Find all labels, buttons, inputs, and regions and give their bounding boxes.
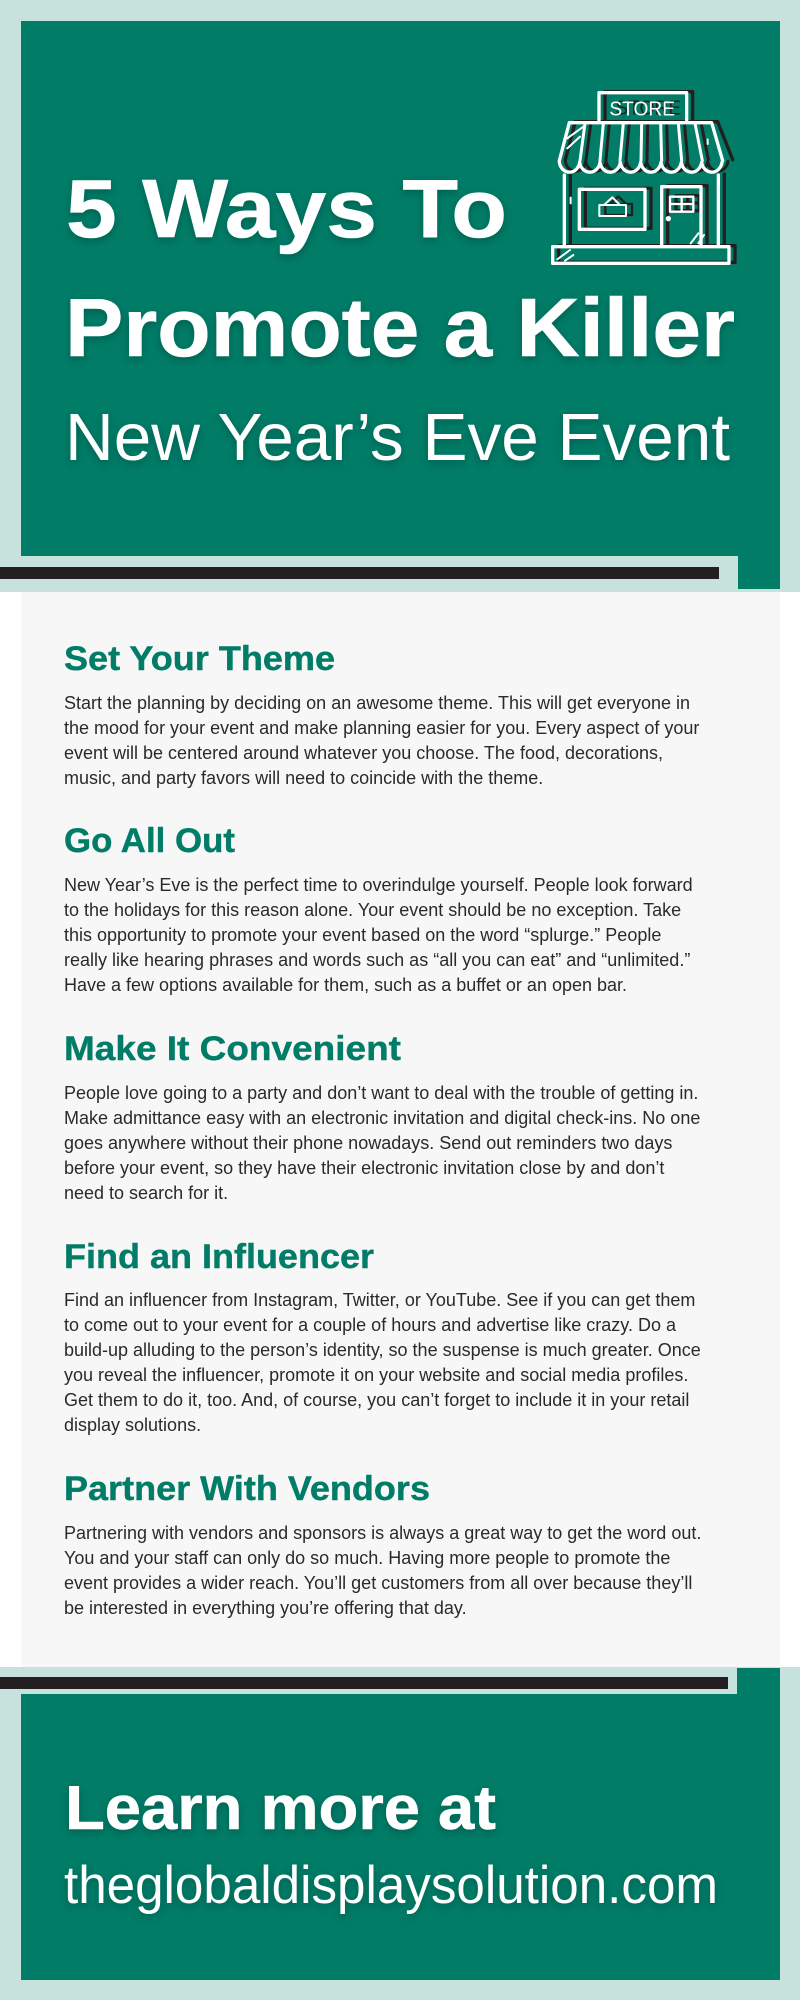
section: Set Your Theme: the mood for your event and make planning easier for you. Every aspect of your (64, 718, 699, 738)
section: Set Your Theme: Start the planning by deciding on an awesome theme. This will get everyone in (64, 693, 690, 713)
icon lines: STORE (609, 99, 675, 121)
section: Partner With Vendors: be interested in everything you’re offering that day. (64, 1598, 467, 1618)
section: Go All Out: Have a few options available for them, such as a buffet or an open bar. (64, 975, 627, 995)
section: Make It Convenient: goes anywhere without their phone nowadays. Send out reminders two days (64, 1133, 672, 1153)
subtitle: New Year’s Eve Event (65, 400, 730, 475)
section: Partner With Vendors: Partner With Vendors (64, 1470, 430, 1508)
section: Go All Out: this opportunity to promote your event based on the word “splurge.” People (64, 925, 661, 945)
footer url: theglobaldisplaysolution.com (64, 1856, 718, 1915)
section: Find an Influencer: Find an influencer from Instagram, Twitter, or YouTube. See if you can get them (64, 1290, 695, 1310)
title: 5 Ways To (66, 162, 507, 255)
section: Find an Influencer: you reveal the influencer, promote it on your website and social media profiles. (64, 1365, 688, 1385)
section: Make It Convenient: People love going to a party and don’t want to deal with the trouble of getting in. (64, 1083, 698, 1103)
section: Find an Influencer: display solutions. (64, 1415, 201, 1435)
section: Find an Influencer: build-up alluding to the person’s identity, so the suspense is much greater. Once (64, 1340, 701, 1360)
section: Make It Convenient: Make It Convenient (64, 1030, 401, 1068)
title: Promote a Killer (65, 281, 735, 374)
section: Partner With Vendors: event provides a wider reach. You’ll get customers from all over because they’ll (64, 1573, 692, 1593)
section: Make It Convenient (64, 1030, 700, 1203)
icon shadow: STORE (615, 98, 681, 120)
footer call to action: Learn more at (65, 1774, 496, 1843)
header divider bar (0, 567, 719, 579)
panel: article body (21, 592, 780, 1667)
icon: store front (553, 92, 735, 263)
panel: footer (0, 1668, 780, 1980)
section: Go All Out: Go All Out (64, 822, 235, 860)
section: Find an Influencer: to come out to your event for a couple of hours and advertise like crazy. Do a (64, 1315, 677, 1335)
section: Set Your Theme: music, and party favors will need to coincide with the theme. (64, 768, 543, 788)
footer call to action (64, 1774, 718, 1915)
section: Make It Convenient: before your event, so they have their electronic invitation close by and don’t (64, 1158, 664, 1178)
section: Set Your Theme: event will be centered around whatever you choose. The food, decorations, (64, 743, 663, 763)
section: Set Your Theme: Set Your Theme (64, 640, 335, 678)
section: Find an Influencer: Get them to do it, too. And, of course, you can’t forget to include it in your retail (64, 1390, 689, 1410)
section: Go All Out: really like hearing phrases and words such as “all you can eat” and “unlimited.” (64, 950, 690, 970)
section: Partner With Vendors: You and your staff can only do so much. Having more people to promote the (64, 1548, 670, 1568)
title (65, 162, 735, 475)
panel: header (0, 21, 780, 589)
section: Go All Out: to the holidays for this reason alone. Your event should be no exception. Take (64, 900, 681, 920)
icon lines (553, 93, 729, 263)
section: Make It Convenient: Make admittance easy with an electronic invitation and digital check-ins. No one (64, 1108, 700, 1128)
section: Partner With Vendors (64, 1470, 701, 1618)
icon shadow (559, 92, 735, 262)
section: Find an Influencer: Find an Influencer (64, 1238, 374, 1276)
section: Partner With Vendors: Partnering with vendors and sponsors is always a great way to get the word out. (64, 1523, 701, 1543)
section: Find an Influencer (64, 1238, 701, 1435)
section: Set Your Theme (64, 640, 699, 788)
section: Go All Out: New Year’s Eve is the perfect time to overindulge yourself. People look forward (64, 875, 693, 895)
section: Make It Convenient: need to search for it. (64, 1183, 228, 1203)
footer divider bar (0, 1677, 728, 1689)
section: Go All Out (64, 822, 693, 995)
